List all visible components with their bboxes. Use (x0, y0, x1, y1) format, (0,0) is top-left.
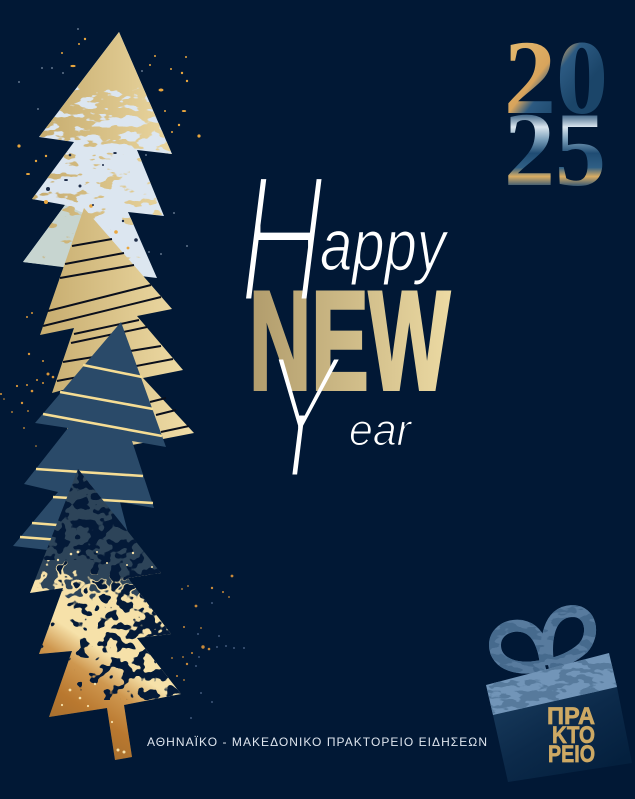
speckles right of tree 4 (171, 575, 233, 681)
muted speckles right of tree 4 (190, 602, 245, 719)
tree 1: gold and pale blue (23, 32, 172, 278)
gift box logo (486, 611, 632, 782)
script word Year (264, 322, 412, 513)
gift bow (495, 611, 590, 668)
agency name: ΑΘΗΝΑΪΚΟ - ΜΑΚΕΔΟΝΙΚΟ ΠΡΑΚΤΟΡΕΙΟ ΕΙΔΗΣΕΩΝ (147, 735, 487, 749)
speckles around tree 1 (17, 38, 201, 249)
logo wordmark: ΚΤΟ (552, 722, 595, 749)
speckles left of trees 2 and 3 (0, 312, 54, 447)
gift box body (493, 687, 632, 782)
capital Y: Y (264, 322, 343, 513)
year 2025 (504, 19, 608, 208)
letters ear: ear (349, 406, 412, 455)
script word Happy (239, 136, 449, 341)
tree 4: dark to gold to bronze with trunk (30, 469, 181, 760)
logo wordmark (547, 703, 595, 768)
logo wordmark: ΡΕΙΟ (548, 741, 595, 768)
year digits 25: 25 (504, 91, 606, 208)
gift lid (486, 653, 617, 715)
year digits 20: 20 (504, 19, 608, 136)
grey speckles around tree 1 (18, 28, 188, 255)
dark speckles on tree 1 (46, 152, 138, 242)
logo wordmark: ΠΡΑ (547, 703, 595, 730)
capital H: H (239, 136, 325, 341)
tree 2: gold with black stripes (40, 208, 194, 476)
tree 3: blue with yellow stripes (13, 322, 166, 560)
letters appy: appy (320, 205, 449, 285)
NEW heading: NEW (249, 261, 450, 419)
